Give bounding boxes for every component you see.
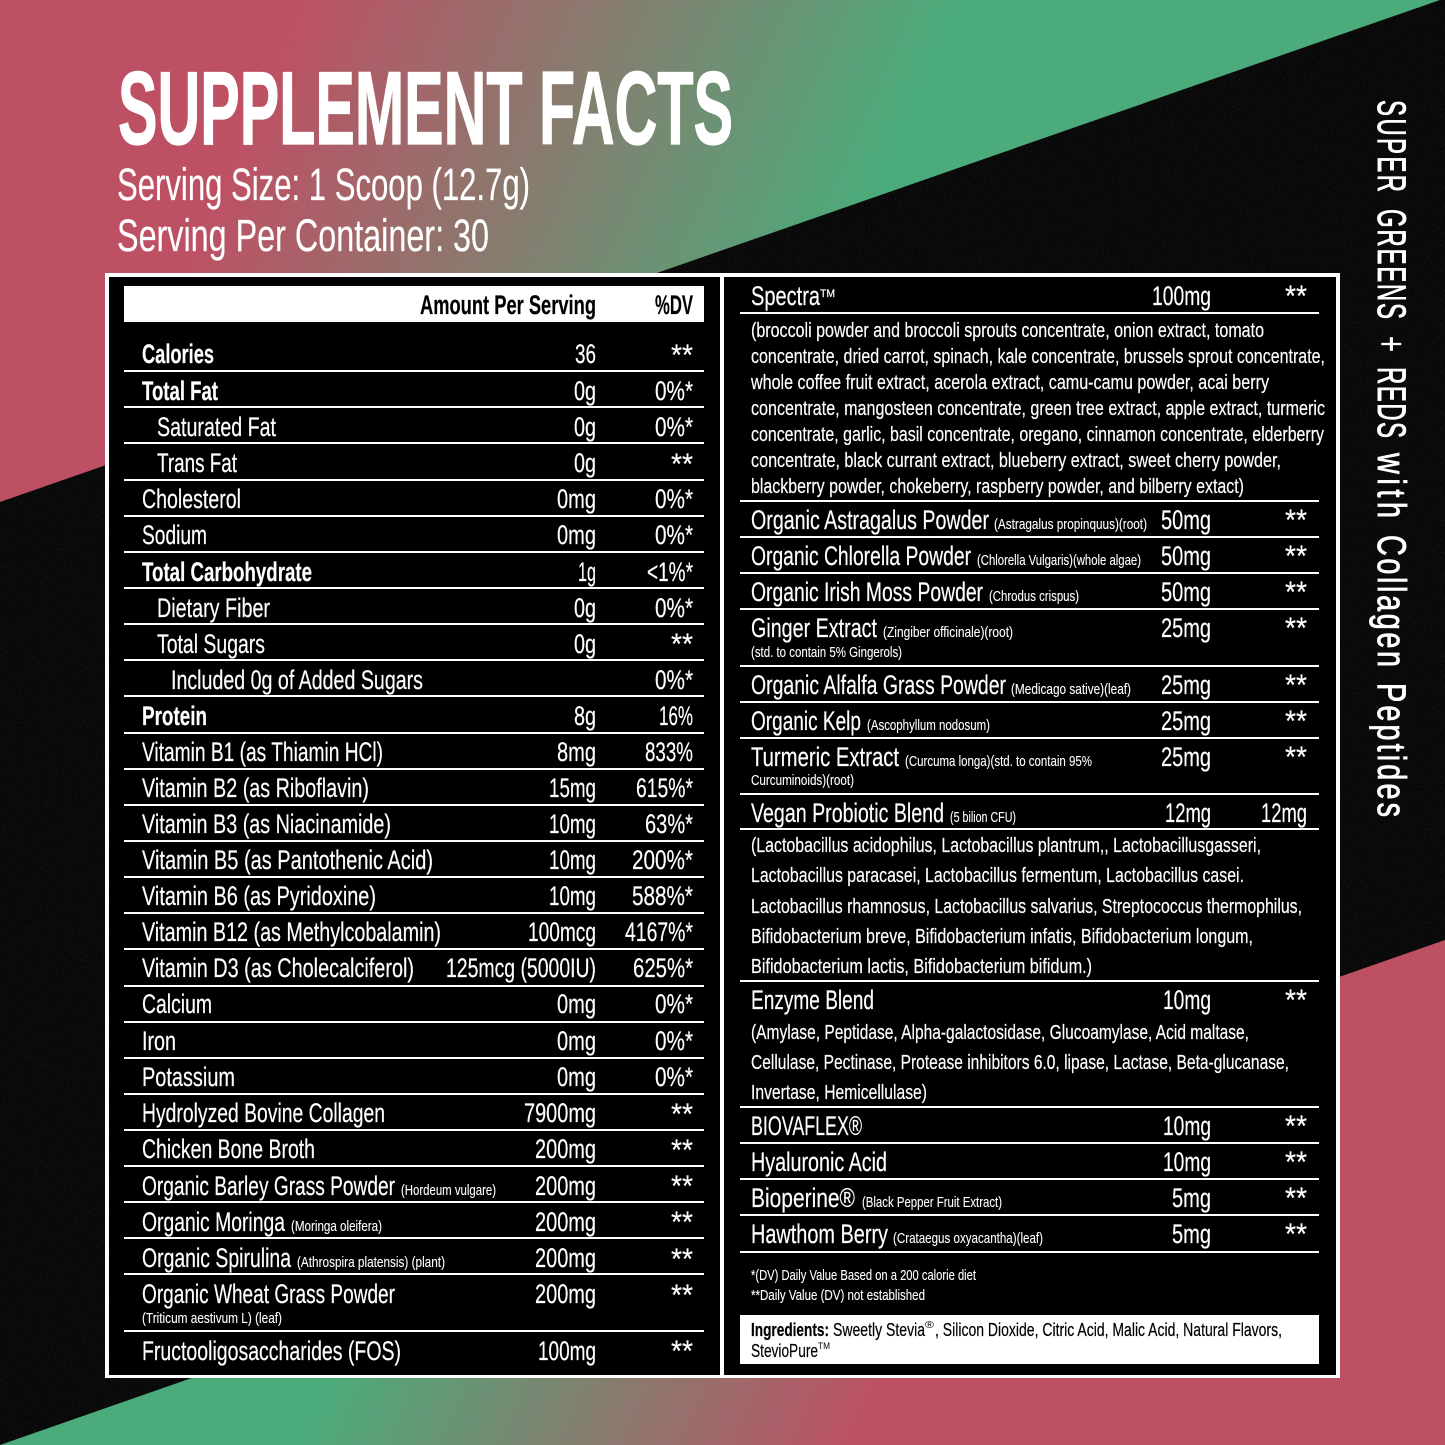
row: Organic Irish Moss Powder: (Chrodus crispus) [989,589,1079,605]
row: Organic Chlorella Powder: Organic Chlorella Powder [751,541,971,571]
row: Total Sugars: Total Sugars [157,629,265,659]
row: Vitamin B1: Vitamin B1 (as Thiamin HCl) [142,737,383,767]
row: Added Sugars: 0%* [655,665,693,695]
row: Hawthorn Berry [751,1218,1307,1251]
row: Organic Wheat Grass Powder [142,1279,693,1327]
row: Hydrolyzed Bovine Collagen: Hydrolyzed Bovine Collagen [142,1098,385,1128]
text block: Spectra ingredients: (broccoli powder and broccoli sprouts concentrate, onion extract, tomato [751,319,1264,342]
row: Cholesterol [142,484,693,514]
row: Organic Chlorella Powder [751,540,1307,573]
row: Iron: Iron [142,1026,176,1056]
row: Total Carbohydrate [142,557,693,587]
row: Spectra [751,280,1307,313]
row: Sodium [142,520,693,550]
row: Vegan Probiotic Blend: (5 bilion CFU) [950,810,1016,826]
row: Ginger Extract: (std. to contain 5% Gingerols) [751,645,902,661]
row: Ginger Extract: (Zingiber officinale)(root) [883,625,1013,641]
row: Chicken Bone Broth: 200mg [535,1134,596,1164]
row: Vitamin B5: Vitamin B5 (as Pantothenic Acid) [142,845,433,875]
footnotes: **Daily Value (DV) not established [751,1288,925,1304]
text block: enzymes: Cellulase, Pectinase, Protease inhibitors 6.0, lipase, Lactase, Beta-glucanase, [751,1051,1289,1074]
row: Fructooligosaccharides: Fructooligosaccharides (FOS) [142,1336,401,1366]
table header bar [124,286,704,322]
row: Spectra: TM [820,288,835,300]
row: Turmeric Extract: Curcuminoids)(root) [751,773,854,789]
row: Ginger Extract: Ginger Extract [751,613,877,643]
row: Iron: 0mg [557,1026,596,1056]
row: Trans Fat: Trans Fat [157,448,237,478]
row: Vitamin B2: 15mg [549,773,596,803]
vertical side label: Peptides [1369,683,1414,817]
row: Bioperine: (Black Pepper Fruit Extract) [862,1195,1002,1211]
row: Calcium: 0mg [557,989,596,1019]
row: Vitamin B1: 833% [645,737,693,767]
row: Trans Fat: 0g [574,448,596,478]
text block: probiotic strains: (Lactobacillus acidophilus, Lactobacillus plantrum,, Lactobacillusgasseri, [751,834,1261,857]
row: Iron [142,1026,693,1056]
row: Organic Kelp: ** [1285,705,1307,738]
row: Vitamin B3: 10mg [549,809,596,839]
row: Organic Alfalfa Grass Powder [751,669,1307,702]
row: Calories: ** [671,339,693,372]
vertical side label: REDS [1370,367,1414,438]
row: Organic Wheat Grass Powder: ** [671,1279,693,1312]
row: Organic Moringa: (Moringa oleifera) [291,1219,382,1235]
table header bar: %DV [655,290,693,320]
row: Added Sugars [171,665,693,695]
text block: probiotic strains: Bifidobacterium breve, Bifidobacterium infatis, Bifidobacterium longum, [751,925,1253,948]
row: Organic Barley Grass Powder: Organic Barley Grass Powder [142,1171,395,1201]
row: Total Sugars: 0g [574,629,596,659]
row: Organic Moringa: ** [671,1206,693,1239]
row: Potassium: Potassium [142,1062,235,1092]
row: Bioperine [751,1182,1307,1215]
row: Total Fat: Total Fat [142,376,218,406]
text block: probiotic strains: Bifidobacterium lactis, Bifidobacterium bifidum.) [751,955,1092,978]
row: Organic Spirulina [142,1243,693,1276]
row: Turmeric Extract [751,741,1307,789]
row: Sodium: 0%* [655,520,693,550]
row: Saturated Fat [157,412,693,442]
row: Added Sugars: Included 0g of Added Sugars [171,665,423,695]
row: Turmeric Extract: (Curcuma longa)(std. to contain 95% [905,754,1092,770]
row: Trans Fat [157,448,693,481]
row: Total Fat: 0%* [655,376,693,406]
row: Hyaluronic Acid: Hyaluronic Acid [751,1147,887,1177]
row: Total Carbohydrate: 1g [578,557,596,587]
row: Vitamin B6 [142,881,693,911]
row: Turmeric Extract: ** [1285,741,1307,774]
row: Vitamin B12: 4167%* [625,917,693,947]
row: Hydrolyzed Bovine Collagen: ** [671,1098,693,1131]
ingredients box: Sweetly Stevia [833,1320,926,1340]
row: Vitamin B6: 10mg [549,881,596,911]
row: Organic Barley Grass Powder: 200mg [535,1171,596,1201]
row: Organic Astragalus Powder: 50mg [1161,505,1211,535]
text block: Spectra ingredients: blackberry powder, chokeberry, raspberry powder, and bilberry extact) [751,475,1244,498]
row: Vegan Probiotic Blend: 12mg [1165,798,1211,828]
vertical side label: GREENS [1370,209,1414,319]
row: Total Sugars: ** [671,628,693,661]
row: Protein: Protein [142,701,207,731]
row: BIOVAFLEX: 10mg [1163,1111,1211,1141]
row: Organic Spirulina: 200mg [535,1243,596,1273]
row: Organic Chlorella Powder: 50mg [1161,541,1211,571]
text block: enzymes: (Amylase, Peptidase, Alpha-galactosidase, Glucoamylase, Acid maltase, [751,1021,1249,1044]
row: Organic Alfalfa Grass Powder: (Medicago sative)(leaf) [1011,682,1131,698]
row: Organic Spirulina: (Athrospira platensis) (plant) [297,1255,445,1271]
row: Organic Irish Moss Powder: 50mg [1161,577,1211,607]
row: Vitamin B6: Vitamin B6 (as Pyridoxine) [142,881,376,911]
row: Cholesterol: Cholesterol [142,484,241,514]
row: Fructooligosaccharides: 100mg [538,1336,596,1366]
row: Vitamin B6: 588%* [632,881,693,911]
row: Organic Irish Moss Powder [751,576,1307,609]
row: Organic Astragalus Powder: (Astragalus propinquus)(root) [994,517,1147,533]
ingredients box: , Silicon Dioxide, Citric Acid, Malic Acid, Natural Flavors, [935,1320,1282,1340]
top gradient band [0,0,1440,502]
row: Bioperine: 5mg [1172,1183,1211,1213]
row: Calories: 36 [575,339,596,369]
ingredients box: TM [818,1341,830,1351]
vertical side label: Collagen [1369,535,1414,667]
row: Vitamin B12: Vitamin B12 (as Methylcobalamin) [142,917,441,947]
row: Total Carbohydrate: <1%* [647,557,693,587]
row: Bioperine: Bioperine® [751,1183,855,1213]
row: Ginger Extract [751,612,1307,661]
vertical side label: with [1369,452,1414,518]
bottom gradient band [0,940,1445,1445]
row: Vitamin B2 [142,773,693,803]
row: Calories: Calories [142,339,214,369]
row: Enzyme Blend: 10mg [1163,985,1211,1015]
row: Organic Wheat Grass Powder: (Triticum aestivum L) (leaf) [142,1311,282,1327]
row: Organic Spirulina: Organic Spirulina [142,1243,292,1273]
vertical side label: SUPER [1370,100,1414,192]
row: Protein: 16% [659,701,693,731]
row: Vitamin B3: 63%* [645,809,693,839]
row: Organic Wheat Grass Powder: 200mg [535,1279,596,1309]
table header bar: Amount Per Serving [420,290,596,320]
row: Vitamin B12: 100mcg [528,917,596,947]
row: Turmeric Extract: 25mg [1161,742,1211,772]
row: Vitamin B3: Vitamin B3 (as Niacinamide) [142,809,391,839]
row: Chicken Bone Broth: Chicken Bone Broth [142,1134,315,1164]
row: Fructooligosaccharides: ** [671,1335,693,1368]
row: Hawthorn Berry: ** [1285,1218,1307,1251]
row: Dietary Fiber: Dietary Fiber [157,593,270,623]
row: Dietary Fiber [157,593,693,623]
row: Vitamin D3: 125mcg (5000IU) [446,953,596,983]
row: Fructooligosaccharides [142,1335,693,1368]
row: Organic Alfalfa Grass Powder: Organic Alfalfa Grass Powder [751,670,1006,700]
row: Saturated Fat: Saturated Fat [157,412,276,442]
row: Ginger Extract: 25mg [1161,613,1211,643]
text block: enzymes [751,1021,1289,1104]
row: Saturated Fat: 0%* [655,412,693,442]
text block: Spectra ingredients: whole coffee fruit extract, acerola extract, camu-camu powder, acai berry [750,371,1270,394]
row: Dietary Fiber: 0%* [655,593,693,623]
row: Hawthorn Berry: (Crataegus oxyacantha)(leaf) [893,1231,1043,1247]
row: Calories [142,339,693,372]
row: Hyaluronic Acid: ** [1285,1146,1307,1179]
row: Organic Astragalus Powder: ** [1285,504,1307,537]
ingredients box: ® [925,1320,935,1331]
row: Organic Wheat Grass Powder: Organic Wheat Grass Powder [142,1279,395,1309]
row: Vitamin B3 [142,809,693,839]
text block: Spectra ingredients [750,319,1325,498]
row: Protein [142,701,693,731]
row: Calcium: 0%* [655,989,693,1019]
row: Organic Irish Moss Powder: ** [1285,576,1307,609]
row: Organic Alfalfa Grass Powder: ** [1285,669,1307,702]
text block: Spectra ingredients: concentrate, black currant extract, blueberry extract, sweet cherry powder, [751,449,1281,472]
row: Spectra: 100mg [1152,281,1211,311]
row: Bioperine: ** [1285,1182,1307,1215]
row: Hyaluronic Acid [751,1146,1307,1179]
row: Vitamin D3 [142,953,693,983]
row: Vegan Probiotic Blend: Vegan Probiotic Blend [751,798,944,828]
row: Vitamin B5: 10mg [549,845,596,875]
text block: probiotic strains [751,834,1302,978]
row: Potassium: 0mg [557,1062,596,1092]
servings per container: Serving Per Container: 30 [117,210,489,261]
row: Vitamin B1 [142,737,693,767]
row: Potassium: 0%* [655,1062,693,1092]
vertical side label: + [1369,336,1413,352]
row: Organic Barley Grass Powder: ** [671,1170,693,1203]
row: Potassium [142,1062,693,1092]
row: Organic Spirulina: ** [671,1243,693,1276]
row: Calcium [142,989,693,1019]
row: BIOVAFLEX: BIOVAFLEX® [751,1111,862,1141]
panel: right column [740,280,1325,1364]
row: Vitamin D3: 625%* [633,953,693,983]
row: Vegan Probiotic Blend [751,798,1307,828]
row: Vitamin B2: 615%* [636,773,693,803]
row: Chicken Bone Broth: ** [671,1134,693,1167]
row: Enzyme Blend: Enzyme Blend [751,985,874,1015]
row: Sodium: Sodium [142,520,207,550]
row: Hawthorn Berry: Hawthom Berry [751,1219,888,1249]
row: Calcium: Calcium [142,989,212,1019]
row: Organic Alfalfa Grass Powder: 25mg [1161,670,1211,700]
ingredients box: Ingredients: [751,1320,829,1340]
title: SUPPLEMENT FACTS [118,51,733,167]
row: Organic Kelp: 25mg [1161,706,1211,736]
row: Dietary Fiber: 0g [574,593,596,623]
row: Vitamin D3: Vitamin D3 (as Cholecalciferol) [142,953,414,983]
row: Cholesterol: 0%* [655,484,693,514]
row: Ginger Extract: ** [1285,612,1307,645]
footnotes [751,1268,976,1304]
row: Spectra: Spectra [751,281,821,311]
row: BIOVAFLEX [751,1110,1307,1143]
row: Organic Moringa: 200mg [535,1207,596,1237]
row: Organic Irish Moss Powder: Organic Irish Moss Powder [751,577,983,607]
row: Organic Kelp [751,705,1307,738]
text block: probiotic strains: Lactobacillus paracasei, Lactobacillus fermentum, Lactobacillus casei. [751,864,1244,887]
row: Saturated Fat: 0g [574,412,596,442]
row: Sodium: 0mg [557,520,596,550]
row: Vitamin B1: 8mg [557,737,596,767]
row: Vitamin B5: 200%* [632,845,693,875]
row: Hydrolyzed Bovine Collagen [142,1098,693,1131]
row: Hyaluronic Acid: 10mg [1163,1147,1211,1177]
text block: enzymes: Invertase, Hemicellulase) [751,1081,927,1104]
row: Chicken Bone Broth [142,1134,693,1167]
ingredients box [740,1315,1319,1364]
row: Organic Kelp: (Ascophyllum nodosum) [867,718,990,734]
row: Cholesterol: 0mg [557,484,596,514]
row: BIOVAFLEX: ** [1285,1110,1307,1143]
row: Organic Barley Grass Powder: (Hordeum vulgare) [401,1183,496,1199]
row: Vitamin B2: Vitamin B2 (as Riboflavin) [142,773,369,803]
row: Enzyme Blend [751,984,1307,1017]
vertical side label [1369,100,1414,817]
row: Iron: 0%* [655,1026,693,1056]
row: Organic Kelp: Organic Kelp [751,706,861,736]
panel: left column [124,286,704,1368]
row: Hawthorn Berry: 5mg [1172,1219,1211,1249]
row: Hydrolyzed Bovine Collagen: 7900mg [524,1098,596,1128]
row: Organic Astragalus Powder [751,504,1307,537]
footnotes: *(DV) Daily Value Based on a 200 calorie diet [751,1268,976,1284]
serving size: Serving Size: 1 Scoop (12.7g) [117,159,530,210]
row: Trans Fat: ** [671,448,693,481]
row: Organic Astragalus Powder: Organic Astragalus Powder [751,505,989,535]
row: Total Fat [142,376,693,406]
ingredients box: StevioPure [751,1341,818,1361]
row: Organic Barley Grass Powder [142,1170,693,1203]
row: Spectra: ** [1285,280,1307,313]
row: Total Carbohydrate: Total Carbohydrate [142,557,312,587]
row: Enzyme Blend: ** [1285,984,1307,1017]
panel: facts table frame [105,273,1340,1378]
row: Total Sugars [157,628,693,661]
row: Organic Moringa [142,1206,693,1239]
row: Protein: 8g [574,701,596,731]
row: Total Fat: 0g [574,376,596,406]
row: Vegan Probiotic Blend: 12mg [1261,798,1307,828]
row: Organic Chlorella Powder: ** [1285,540,1307,573]
text block: probiotic strains: Lactobacillus rhamnosus, Lactobacillus salvarius, Streptococcus thermophilus, [751,895,1302,918]
row: Organic Chlorella Powder: (Chlorella Vulgaris)(whole algae) [977,553,1141,569]
row: Organic Moringa: Organic Moringa [142,1207,286,1237]
row: Turmeric Extract: Turmeric Extract [751,742,899,772]
